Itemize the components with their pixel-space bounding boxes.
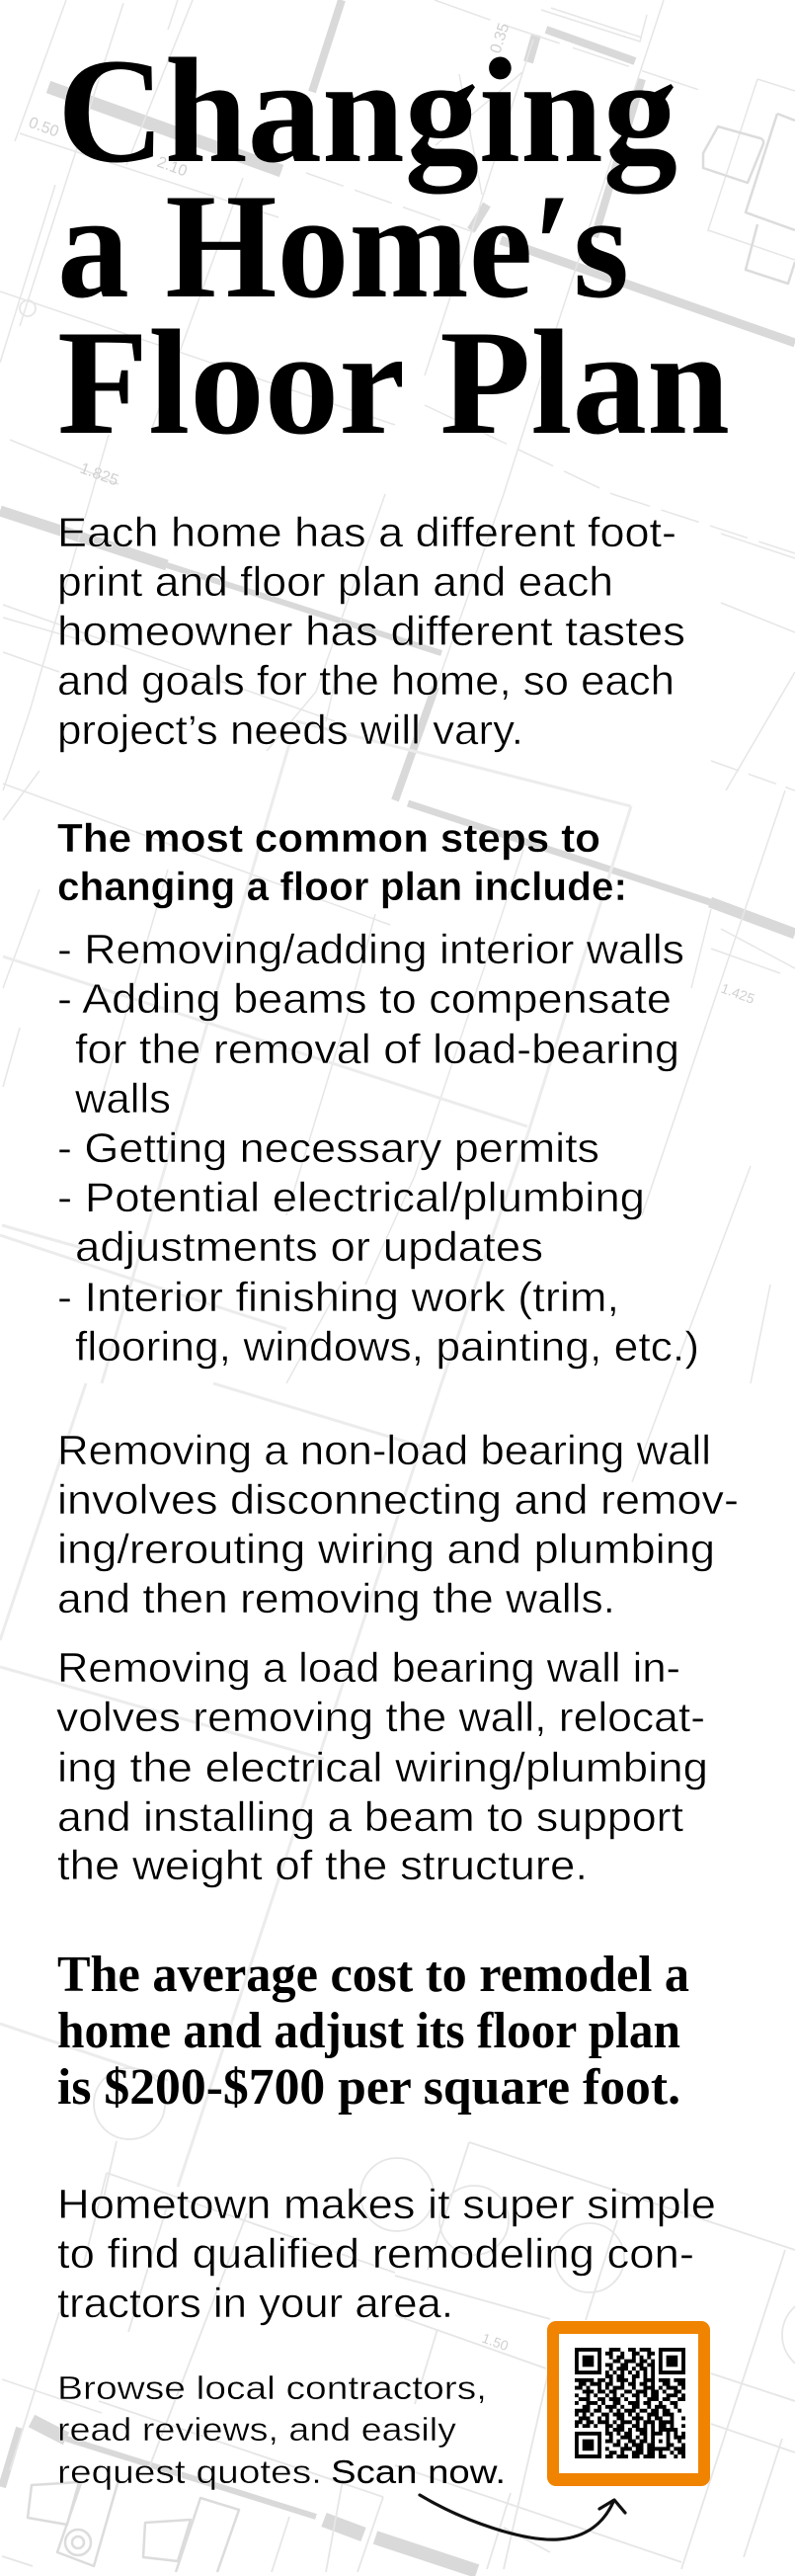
non-load bearing wall paragraph xyxy=(57,1427,739,1621)
steps heading: changing a floor plan include: xyxy=(57,864,627,909)
arrow pointing to QR code xyxy=(420,2495,625,2539)
steps list xyxy=(57,926,699,1370)
steps list: - Removing/adding interior walls xyxy=(57,926,684,972)
title: Floor Plan xyxy=(57,299,730,465)
steps list: walls xyxy=(74,1075,171,1122)
cost callout: is $200-$700 per square foot. xyxy=(57,2059,680,2116)
intro paragraph: Each home has a different foot- xyxy=(57,509,676,555)
steps heading: The most common steps to xyxy=(57,815,600,861)
steps heading xyxy=(57,815,627,909)
call to action text: read reviews, and easily xyxy=(57,2411,457,2448)
intro paragraph: and goals for the home, so each xyxy=(57,657,675,704)
background dimension labels: 0.50 xyxy=(27,115,61,140)
background dimension labels: 0.35 xyxy=(488,21,513,55)
load bearing wall paragraph xyxy=(56,1644,708,1888)
title: Changing xyxy=(57,28,677,195)
call to action text xyxy=(57,2369,506,2490)
steps list: adjustments or updates xyxy=(75,1223,543,1270)
non-load bearing wall paragraph: Removing a non-load bearing wall xyxy=(57,1427,711,1473)
steps list: - Interior finishing work (trim, xyxy=(57,1274,619,1320)
call to action text: request quotes. xyxy=(57,2453,322,2490)
call to action text: Scan now. xyxy=(331,2453,506,2490)
load bearing wall paragraph: ing the electrical wiring/plumbing xyxy=(57,1744,708,1790)
call to action text: Browse local contractors, xyxy=(57,2369,487,2406)
background dimension labels: 1.425 xyxy=(719,980,757,1007)
QR code panel xyxy=(547,2321,710,2486)
title: a Home′s xyxy=(57,163,629,329)
non-load bearing wall paragraph: involves disconnecting and remov- xyxy=(57,1476,739,1523)
intro paragraph: print and floor plan and each xyxy=(57,558,613,605)
hometown paragraph: Hometown makes it super simple xyxy=(57,2181,716,2227)
QR code xyxy=(575,2350,685,2456)
intro paragraph: project’s needs will vary. xyxy=(57,706,523,753)
title xyxy=(57,28,730,465)
load bearing wall paragraph: volves removing the wall, relocat- xyxy=(56,1694,705,1740)
hometown paragraph: to find qualified remodeling con- xyxy=(57,2230,694,2277)
steps list: - Potential electrical/plumbing xyxy=(57,1174,645,1220)
load bearing wall paragraph: the weight of the structure. xyxy=(57,1842,588,1888)
hometown paragraph: tractors in your area. xyxy=(57,2280,453,2326)
background dimension labels: 1.825 xyxy=(78,460,120,489)
intro paragraph xyxy=(57,509,685,753)
background dimension labels: 2.10 xyxy=(155,154,190,180)
load bearing wall paragraph: Removing a load bearing wall in- xyxy=(57,1644,680,1691)
cost callout: The average cost to remodel a xyxy=(57,1947,689,2003)
non-load bearing wall paragraph: ing/rerouting wiring and plumbing xyxy=(57,1526,715,1572)
non-load bearing wall paragraph: and then removing the walls. xyxy=(57,1575,615,1621)
steps list: for the removal of load-bearing xyxy=(75,1026,679,1072)
load bearing wall paragraph: and installing a beam to support xyxy=(57,1793,683,1840)
steps list: - Adding beams to compensate xyxy=(57,975,672,1022)
steps list: - Getting necessary permits xyxy=(57,1124,599,1171)
cost callout: home and adjust its floor plan xyxy=(57,2003,680,2059)
steps list: flooring, windows, painting, etc.) xyxy=(75,1323,699,1370)
intro paragraph: homeowner has different tastes xyxy=(57,608,685,654)
cost callout xyxy=(57,1947,689,2116)
background dimension labels: 1.50 xyxy=(480,2330,511,2354)
hometown paragraph xyxy=(57,2181,716,2326)
